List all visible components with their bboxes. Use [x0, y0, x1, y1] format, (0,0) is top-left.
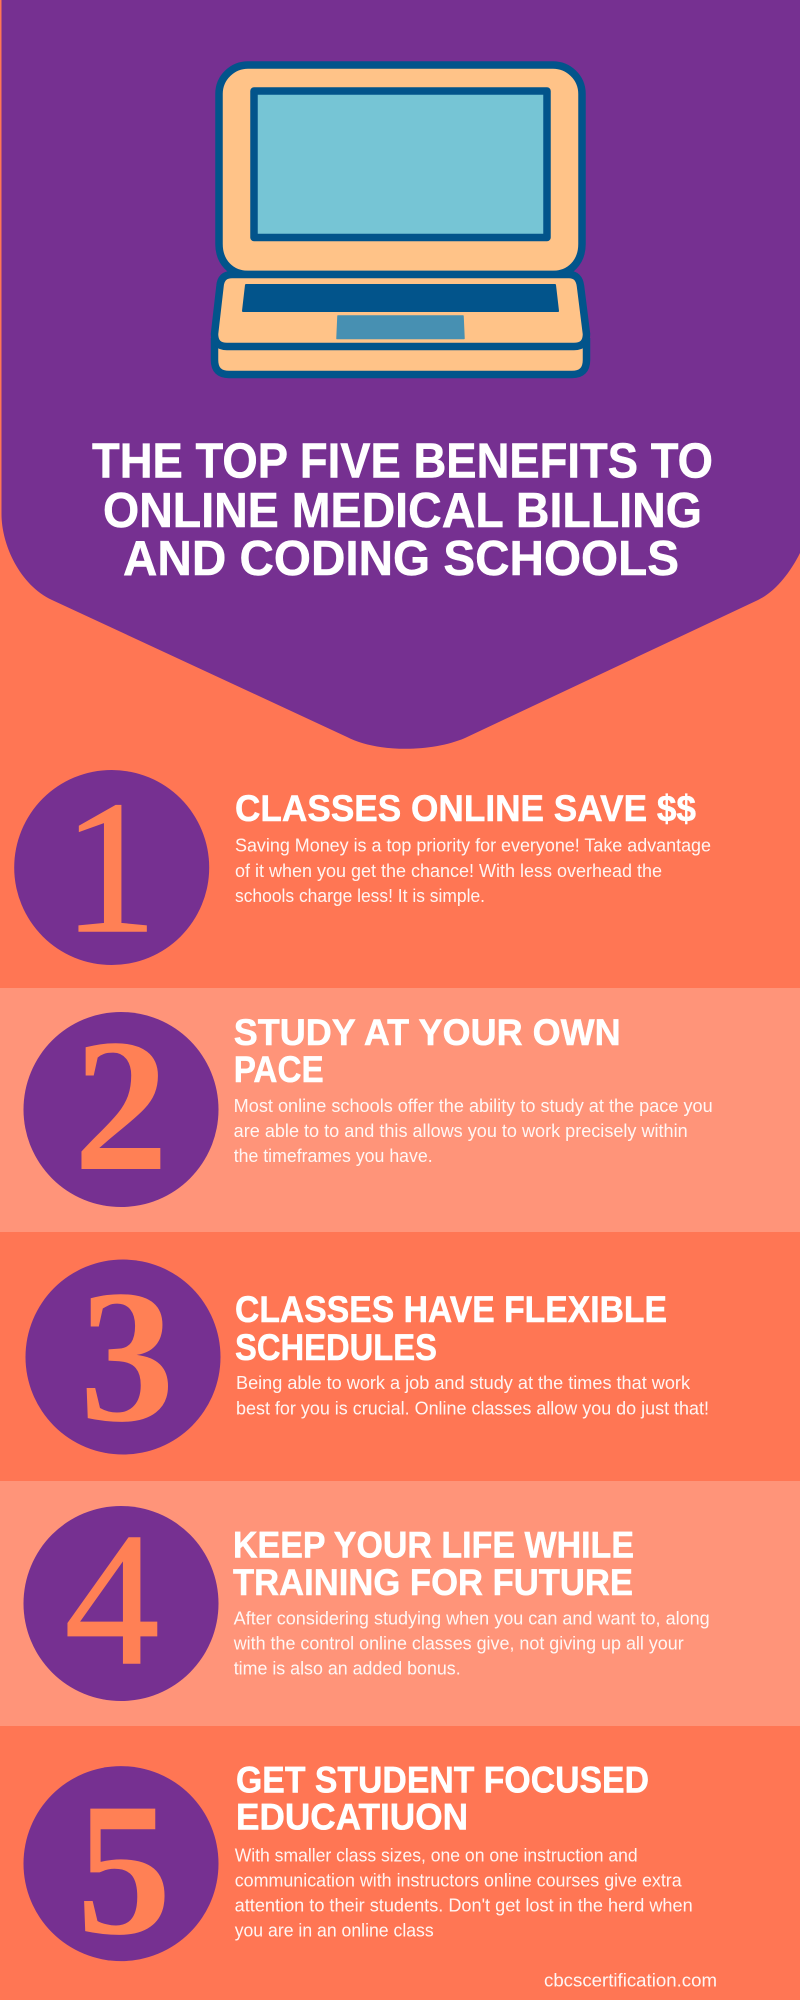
body 1: Saving Money is a top priority for everyone! Take advantage	[235, 836, 711, 856]
icon: laptop	[214, 65, 586, 374]
body 4: time is also an added bonus.	[234, 1658, 461, 1678]
number badge 3: 3	[80, 1252, 174, 1462]
heading 5: EDUCATIUON	[236, 1796, 468, 1837]
heading 5	[236, 1760, 649, 1837]
title	[92, 434, 713, 586]
body 3	[236, 1373, 709, 1418]
body 1: schools charge less! It is simple.	[235, 886, 485, 906]
number badge 2: 2	[74, 1001, 168, 1211]
heading 3: CLASSES HAVE FLEXIBLE	[235, 1289, 667, 1330]
body 5: communication with instructors online courses give extra	[235, 1871, 683, 1891]
heading 1: CLASSES ONLINE SAVE $$	[235, 788, 696, 829]
heading 3: SCHEDULES	[235, 1327, 437, 1368]
title: ONLINE MEDICAL BILLING	[103, 484, 702, 538]
section 3	[26, 1252, 709, 1462]
body 3: Being able to work a job and study at the times that work	[236, 1373, 691, 1393]
body 3: best for you is crucial. Online classes allow you do just that!	[236, 1398, 709, 1418]
section 4	[24, 1495, 710, 1705]
body 4: with the control online classes give, not giving up all your	[233, 1634, 684, 1654]
number badge 1: 1	[62, 763, 158, 973]
heading 5: GET STUDENT FOCUSED	[236, 1760, 649, 1801]
body 5: attention to their students. Don't get lost in the herd when	[235, 1895, 693, 1915]
body 4	[233, 1608, 710, 1678]
heading 4: KEEP YOUR LIFE WHILE	[233, 1524, 634, 1566]
body 2	[234, 1096, 713, 1166]
body 5: With smaller class sizes, one on one instruction and	[235, 1845, 638, 1865]
title: AND CODING SCHOOLS	[123, 532, 679, 586]
body 5	[235, 1845, 693, 1941]
heading 2: PACE	[234, 1049, 324, 1090]
body 1	[235, 836, 711, 906]
heading 4: TRAINING FOR FUTURE	[233, 1562, 633, 1603]
number badge 5: 5	[76, 1765, 172, 1975]
body 4: After considering studying when you can and want to, along	[234, 1608, 710, 1628]
number badge 3	[26, 1252, 220, 1462]
band: section 4	[0, 1481, 800, 1726]
footer url: cbcscertification.com	[544, 1970, 717, 1990]
number badge 4: 4	[64, 1495, 160, 1705]
number badge 1	[14, 763, 209, 973]
section 2	[24, 1001, 713, 1211]
body 1: of it when you get the chance! With less overhead the	[235, 861, 662, 881]
heading 3	[235, 1289, 667, 1368]
band: section 2	[0, 988, 800, 1232]
section 5	[24, 1760, 693, 1975]
number badge 2	[24, 1001, 218, 1211]
body 5: you are in an online class	[235, 1921, 434, 1941]
number badge 4	[24, 1495, 218, 1705]
body 2: the timeframes you have.	[234, 1146, 433, 1166]
body 2: Most online schools offer the ability to study at the pace you	[234, 1096, 713, 1116]
heading 2: STUDY AT YOUR OWN	[234, 1012, 621, 1053]
section 1	[14, 763, 711, 973]
heading 4	[233, 1524, 634, 1603]
title: THE TOP FIVE BENEFITS TO	[92, 434, 713, 488]
number badge 5	[24, 1765, 218, 1975]
body 2: are able to to and this allows you to work precisely within	[234, 1121, 688, 1141]
heading 2	[234, 1012, 621, 1090]
header banner	[2, 0, 800, 749]
